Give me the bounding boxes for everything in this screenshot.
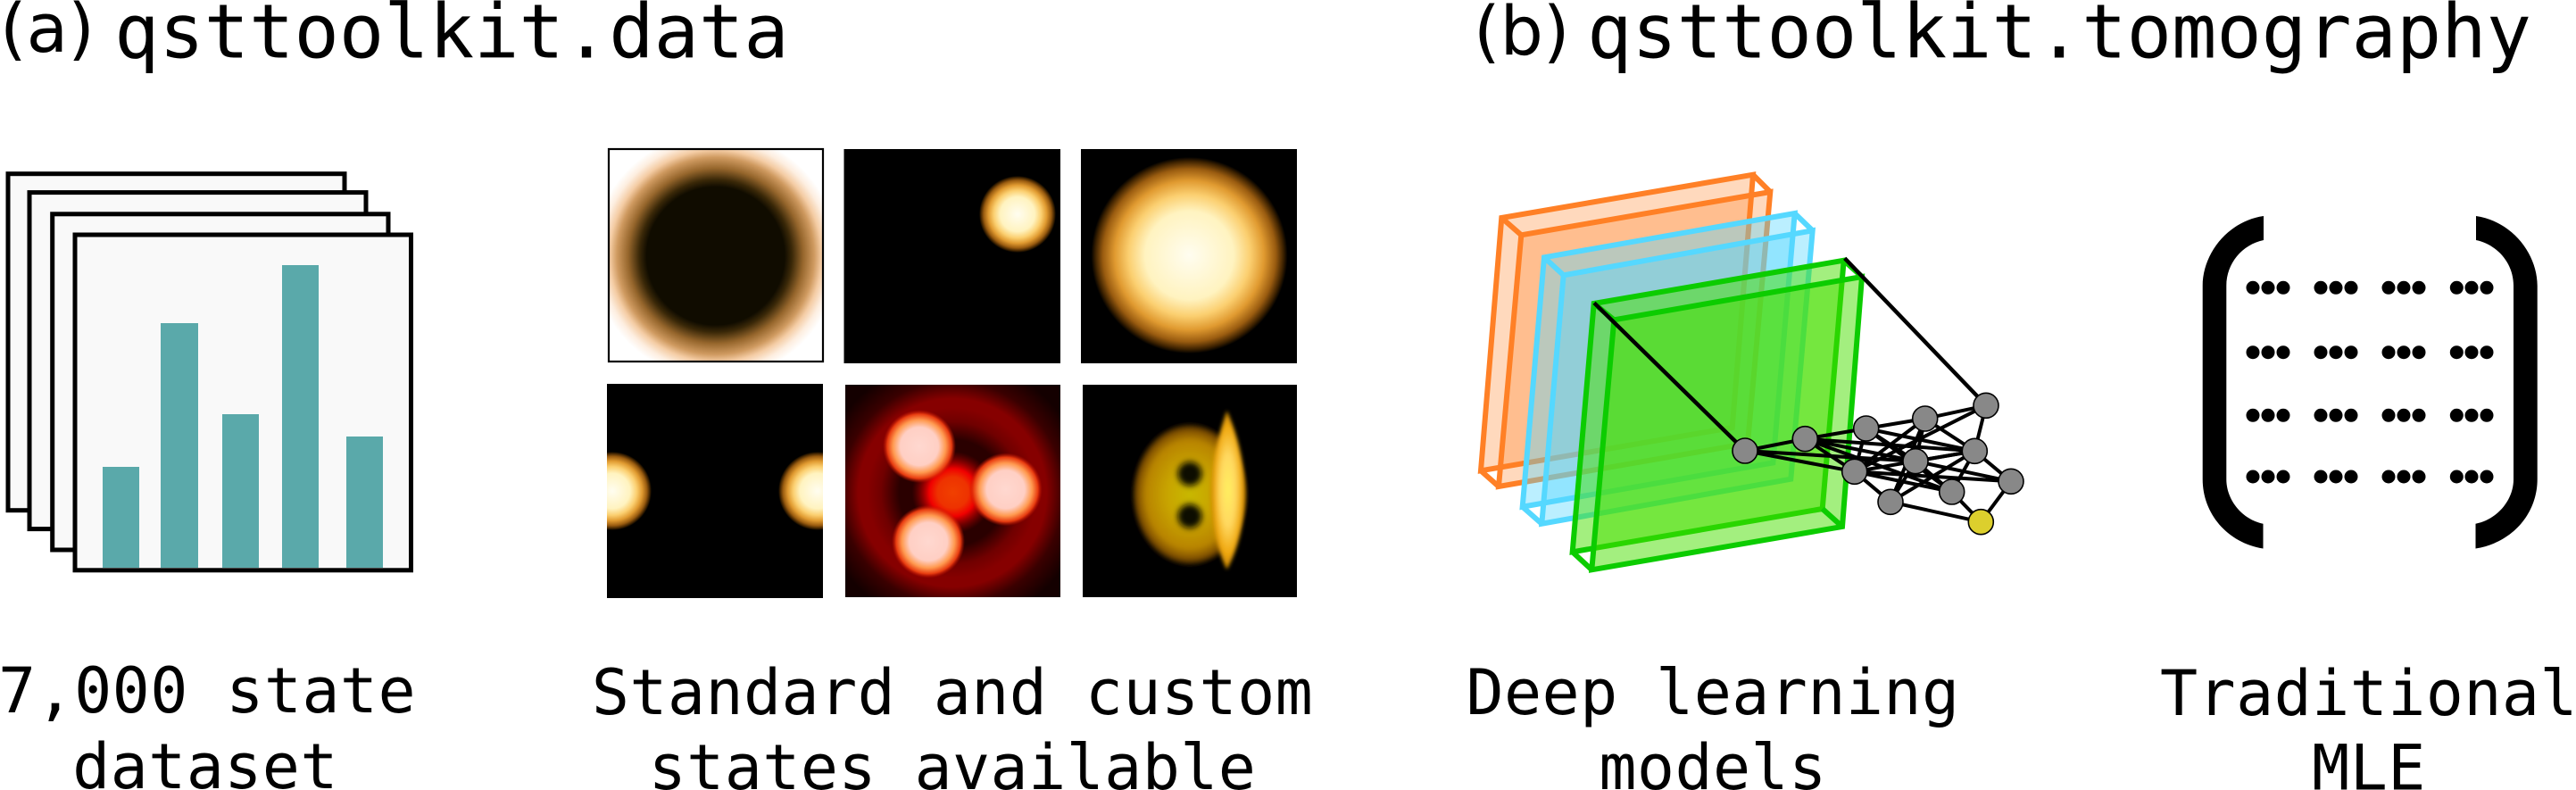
- image: state plot 1 dark disc on white: [607, 148, 825, 362]
- blue layer: [1523, 213, 1813, 524]
- network nodes: [1733, 393, 2023, 535]
- matrix dots row 1: [2246, 281, 2494, 295]
- matrix dots row 2: [2246, 345, 2494, 359]
- icon: density matrix in brackets: [2203, 216, 2538, 548]
- left bracket: [2203, 216, 2264, 548]
- image: state plot 6 yellow state with lens: [1083, 385, 1297, 597]
- green layer: [1573, 261, 1862, 570]
- right bracket: [2476, 216, 2538, 548]
- matrix dots row 4: [2246, 470, 2494, 484]
- caption: 7,000 state dataset: 7,000 state: [0, 654, 416, 728]
- projection lines: [1594, 258, 1986, 451]
- caption: standard and custom states available: [592, 656, 1313, 790]
- icon: convolutional layers and neural network: [1481, 175, 2023, 570]
- matrix dots row 3: [2246, 409, 2494, 422]
- orange layer: [1481, 175, 1770, 486]
- bar chart bars: [103, 265, 383, 568]
- image: state plot 5 three-lobed red state: [845, 385, 1060, 597]
- caption: traditional MLE: [2160, 657, 2576, 790]
- caption: traditional MLE: Traditional: [2160, 657, 2576, 730]
- image: state plot 3 thermal state: [1081, 149, 1297, 363]
- network edges: [1745, 405, 2011, 522]
- image: state plot 4 cat state: [607, 384, 823, 598]
- image: state plot 2 displaced coherent state: [844, 149, 1060, 363]
- icon: stack of dataset cards with bar chart: [8, 174, 411, 570]
- caption: standard and custom states available: Standard and custom: [592, 656, 1313, 729]
- caption: 7,000 state dataset: [0, 654, 416, 790]
- caption: deep learning models: Deep learning: [1466, 656, 1960, 729]
- caption: deep learning models: [1466, 656, 1960, 790]
